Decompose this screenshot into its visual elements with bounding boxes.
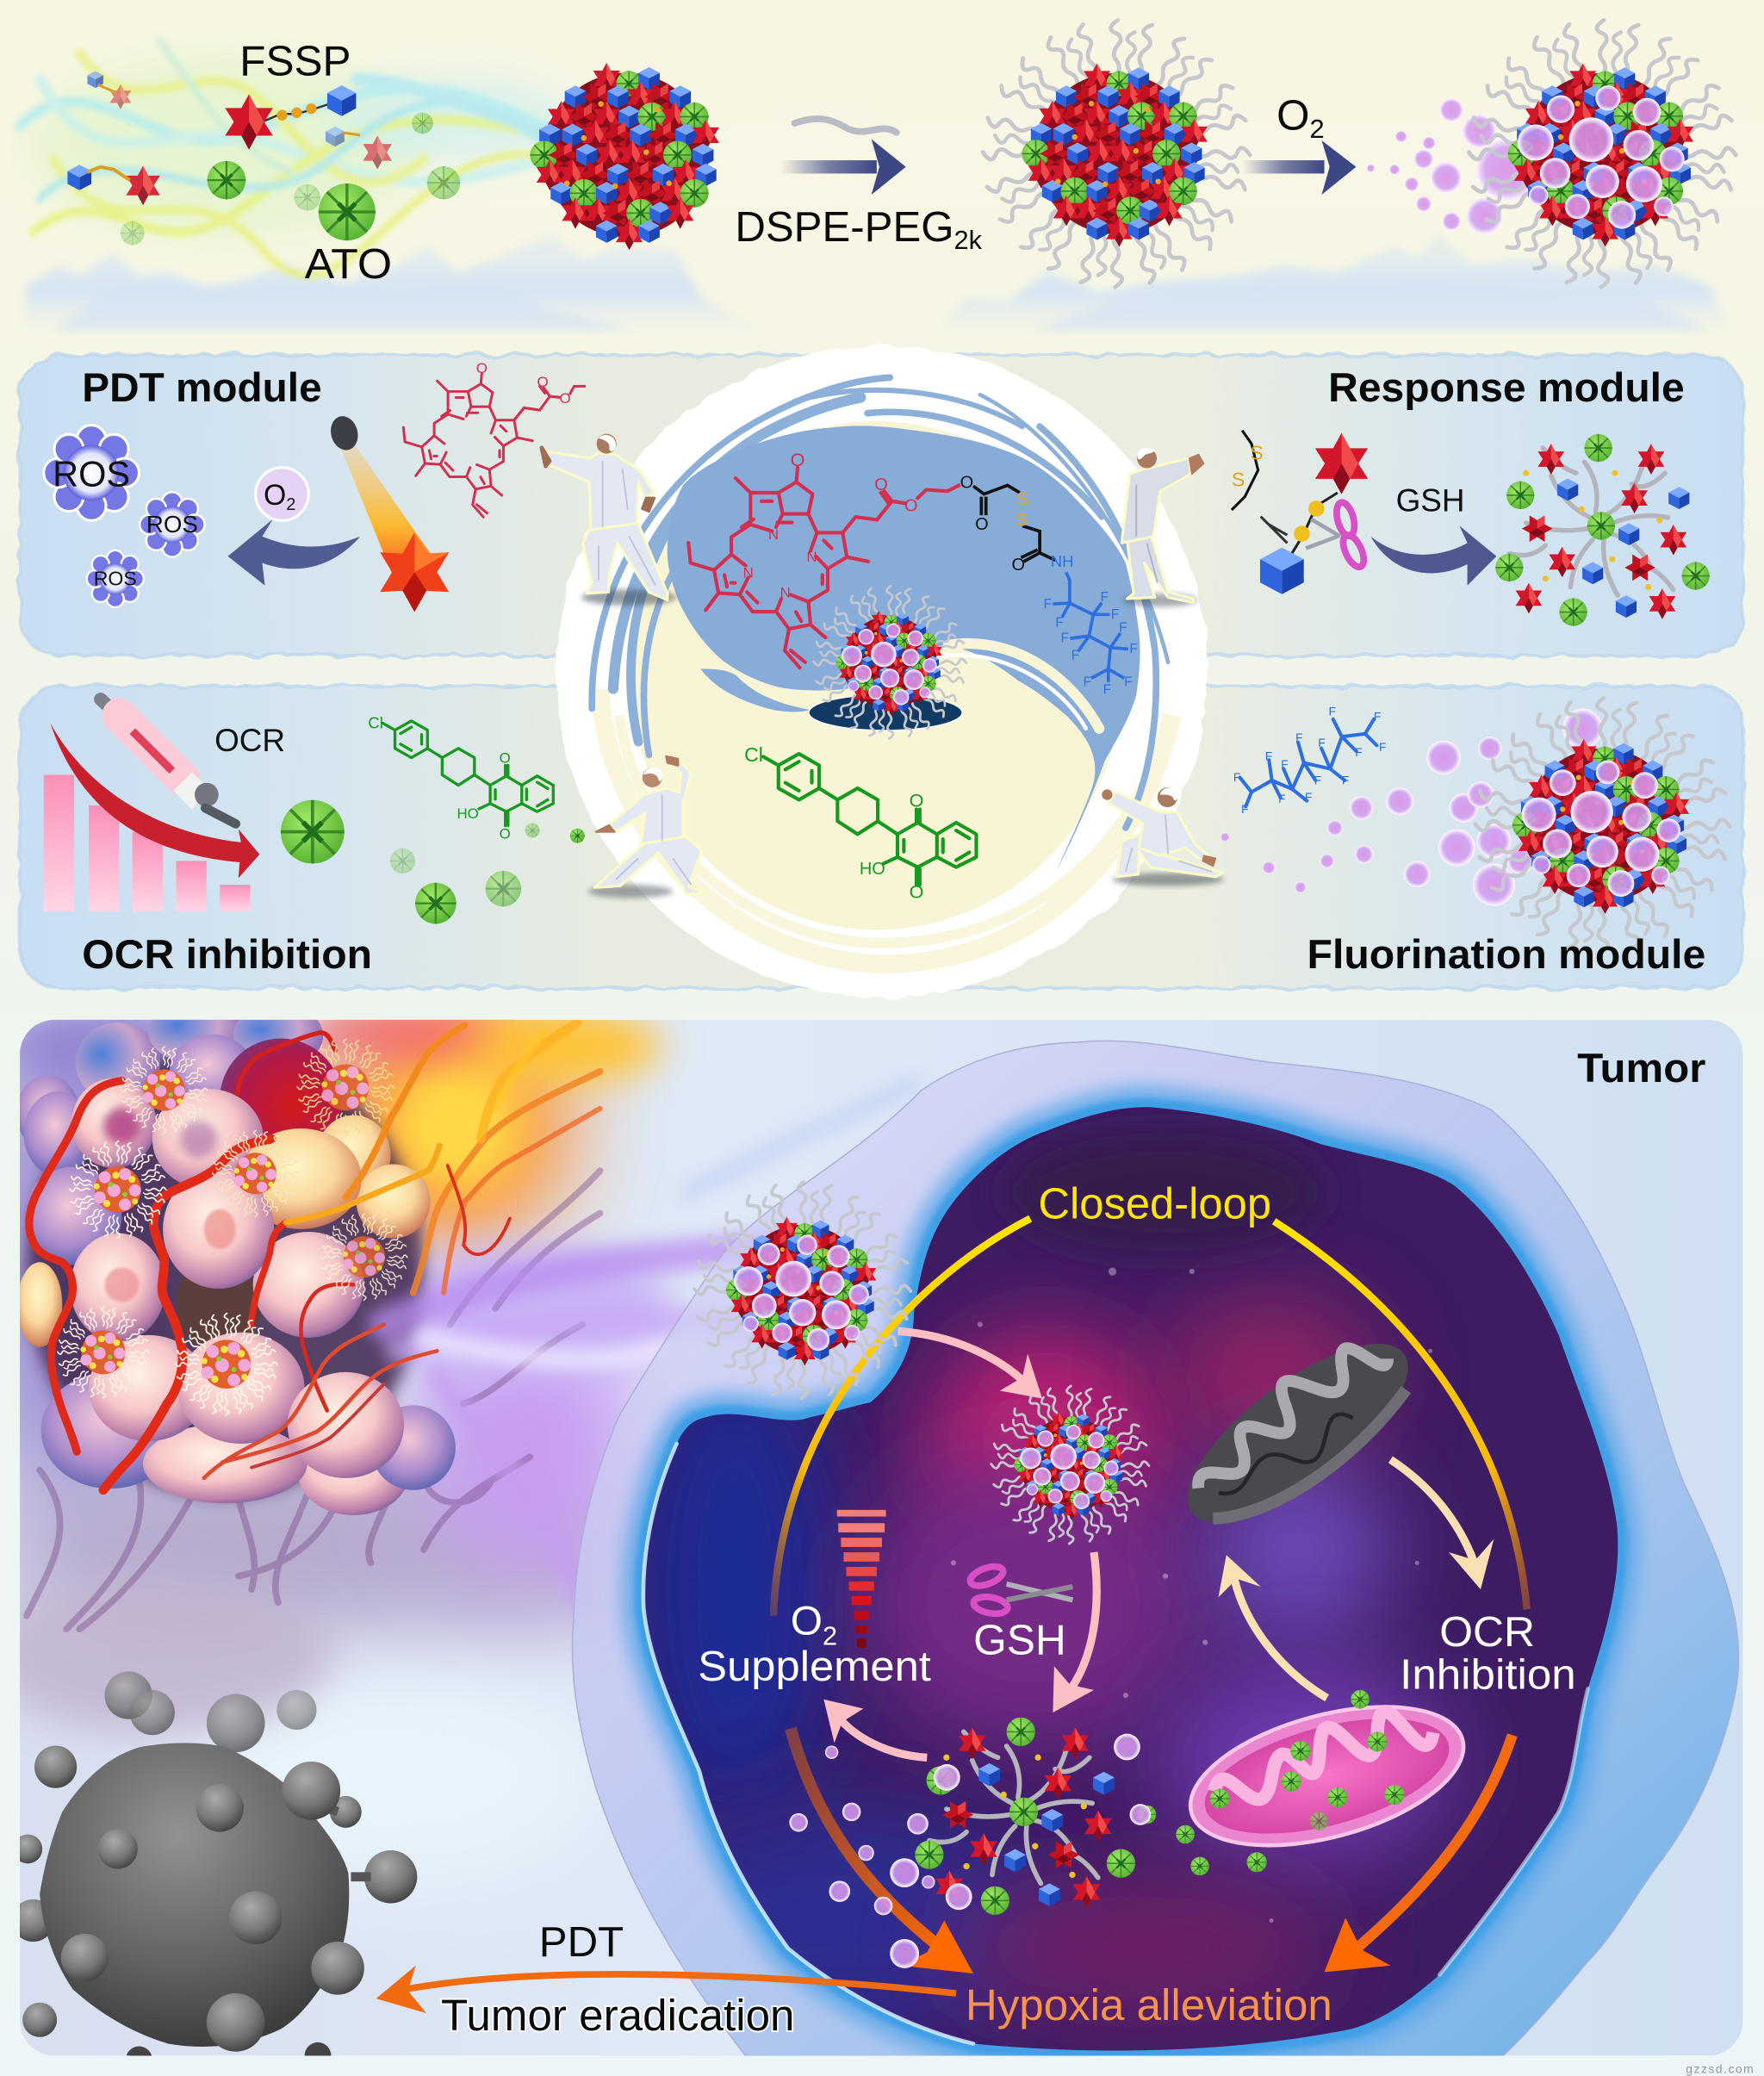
closed-loop yellow arc left xyxy=(773,1219,1030,1616)
linker chain: S xyxy=(1016,509,1028,530)
small ATO structure xyxy=(368,714,553,842)
central porphyrin molecule: N xyxy=(743,564,754,581)
panel: tumor microenvironment xyxy=(0,1000,1742,2073)
small porphyrin structure: O xyxy=(559,390,571,407)
label O2 top: O xyxy=(1276,92,1309,140)
white brush ring xyxy=(556,345,1208,998)
heading: OCR inhibition: OCR inhibition xyxy=(82,932,372,978)
disulfide fragment: S xyxy=(1250,442,1264,464)
linker chain: O xyxy=(975,515,989,534)
blue brush arcs xyxy=(592,377,1168,828)
central fluorinated chain: F xyxy=(1055,615,1064,630)
label Hypoxia alleviation: Hypoxia alleviation xyxy=(966,1980,1332,2029)
faded vessels xyxy=(27,1171,600,1629)
central fluorinated chain: F xyxy=(1043,597,1052,612)
dark gaps xyxy=(27,1047,424,1496)
label DSPE-PEG2k: DSPE-PEG xyxy=(735,203,954,251)
fluorinated chain: F xyxy=(1241,802,1249,816)
fluorinated chain: F xyxy=(1314,773,1321,786)
tumor cell outer membrane xyxy=(572,1041,1739,2067)
fluorinated chain: F xyxy=(1379,740,1386,754)
central nanoparticle xyxy=(814,586,966,738)
label FSSP: FSSP xyxy=(239,38,351,85)
light beams to tumor cell xyxy=(384,1086,914,1602)
label OCR Inhibition xyxy=(1400,1608,1576,1698)
disassembled fragments in cell xyxy=(915,1718,1135,1915)
watermark: gzzsd.com xyxy=(1686,2061,1755,2075)
central fluorinated chain: F xyxy=(1060,631,1069,646)
central fluorinated chain: F xyxy=(1101,590,1109,605)
small porphyrin structure: O xyxy=(537,374,549,390)
label PDT: PDT xyxy=(539,1918,624,1966)
fluorinated chain: F xyxy=(1342,773,1349,786)
fluorinated chain: F xyxy=(1318,736,1326,749)
central porphyrin molecule: N xyxy=(780,584,791,600)
cream streak band xyxy=(600,689,1172,964)
fluorinated chain: F xyxy=(1355,745,1363,759)
small ATO structure: O xyxy=(500,750,511,767)
label O2 supplement: Supplement xyxy=(698,1643,931,1690)
linker chain: O xyxy=(874,475,888,494)
label OCR Inhibition: OCR xyxy=(1439,1608,1535,1656)
panel background xyxy=(20,1020,1742,2055)
label GSH in cell: GSH xyxy=(973,1616,1066,1663)
mountains backdrop xyxy=(22,233,1732,331)
icon: oxygen bubble: O xyxy=(264,479,286,512)
arrow: GSH cleavage xyxy=(1370,525,1496,586)
heading: PDT module: PDT module xyxy=(82,365,322,411)
icon: ROS large xyxy=(44,426,139,520)
PEG chain icon xyxy=(795,119,897,133)
label DSPE-PEG2k: 2k xyxy=(954,225,983,255)
arrow: PEGylation xyxy=(781,139,906,195)
arrow fragments to supplement xyxy=(823,1700,927,1757)
central ATO molecule: O xyxy=(910,790,923,811)
icon: oxygen bubble xyxy=(256,468,308,520)
disassembled fragments xyxy=(1495,434,1710,626)
central fluorinated chain: F xyxy=(1119,620,1127,635)
icon: ROS small xyxy=(87,550,144,607)
arrow: oxygen loading xyxy=(1242,140,1356,195)
membrane highlight xyxy=(643,1444,1588,2043)
PDT module contents xyxy=(44,360,586,612)
oxygen gradient bar xyxy=(837,1510,886,1648)
label Tumor eradication: Tumor eradication xyxy=(441,1991,795,2040)
closed-loop yellow arc right xyxy=(1274,1221,1527,1609)
fluorinated chain: F xyxy=(1374,709,1381,723)
central fluorinated chain: F xyxy=(1129,642,1138,656)
label OCR: OCR xyxy=(214,723,285,758)
central porphyrin molecule: N xyxy=(806,549,817,565)
icon: star and cube linker xyxy=(1260,433,1368,594)
central fluorinated chain: F xyxy=(1111,607,1119,622)
oxygen bubbles in cell xyxy=(789,1734,1151,1968)
small ATO structure: HO xyxy=(457,805,479,822)
label O2 supplement xyxy=(698,1598,931,1690)
icon: ROS small: ROS xyxy=(94,568,137,590)
blue yang lobe xyxy=(668,426,1140,870)
FSSP prodrug molecule xyxy=(225,85,356,150)
tai chi figure lower left xyxy=(588,756,706,898)
label O2 supplement: 2 xyxy=(823,1621,837,1651)
oxygen bubbles xyxy=(1221,709,1602,906)
linker chain: NH xyxy=(1051,552,1073,570)
OCR inhibition contents xyxy=(44,699,585,923)
bare nanoparticle xyxy=(530,63,719,250)
central porphyrin molecule: N xyxy=(768,526,779,543)
arrow GSH to fragments xyxy=(1053,1552,1096,1712)
label OCR Inhibition: Inhibition xyxy=(1400,1650,1576,1698)
label O2 top: 2 xyxy=(1309,114,1325,144)
tai chi figure upper left xyxy=(542,434,677,606)
linker chain: O xyxy=(960,474,973,493)
Fluorination module contents xyxy=(1221,698,1730,953)
fluorinated chain: F xyxy=(1265,749,1272,763)
top section: nanoparticle self-assembly xyxy=(20,20,1736,331)
Response module contents xyxy=(1232,431,1710,626)
linker chain: S xyxy=(1016,488,1028,509)
icon: ROS medium xyxy=(140,492,205,557)
fluorinated chain: F xyxy=(1329,704,1336,718)
membrane rim xyxy=(643,1107,1618,2050)
fluorinated chain: F xyxy=(1281,757,1289,771)
arrow: red decline xyxy=(50,724,259,878)
fluorinated chain xyxy=(1233,704,1386,816)
white swoosh lines xyxy=(943,655,1086,729)
icon: diving mitochondrion rocket xyxy=(101,699,236,824)
heading Tumor: Tumor xyxy=(1577,1046,1705,1091)
yin-yang taiji emblem xyxy=(542,345,1224,998)
tumor cell cluster xyxy=(16,1000,456,1515)
icon: laser beam xyxy=(327,413,437,580)
cream swoosh tongue xyxy=(948,643,1099,729)
small porphyrin structure xyxy=(403,360,586,517)
tai chi figure lower right xyxy=(1102,787,1224,886)
central fluorinated chain: F xyxy=(1103,683,1111,698)
icon: irradiated star xyxy=(380,532,449,612)
arrow: PDT to tumor eradication xyxy=(376,1966,956,2013)
central ATO molecule xyxy=(744,743,976,902)
cream inner disc xyxy=(630,421,1123,929)
fluorinated chain: F xyxy=(1295,730,1303,744)
central ATO molecule: HO xyxy=(860,860,885,879)
icon: oxygen bubble: 2 xyxy=(286,495,295,514)
ATO balls around mitochondrion xyxy=(1138,1690,1405,1875)
arrow mitochondrion to OCR xyxy=(1390,1459,1494,1589)
central fluorinated chain: F xyxy=(1084,674,1091,689)
linker chain xyxy=(855,474,1073,575)
disulfide fragment: S xyxy=(1232,468,1245,490)
blue lobe tail xyxy=(700,668,811,712)
red blood vessels xyxy=(29,1022,600,1490)
label Closed-loop: Closed-loop xyxy=(1038,1179,1271,1228)
loaded nanoparticle xyxy=(1475,698,1730,953)
cell interior shading xyxy=(623,1086,1655,2067)
icon: ROS large: ROS xyxy=(53,453,130,494)
orange arrow right to hypoxia xyxy=(1325,1735,1512,1972)
disulfide fragment xyxy=(1232,431,1287,543)
label ATO: ATO xyxy=(305,240,392,288)
small porphyrin structure: O xyxy=(476,360,488,376)
icon: ATO ball xyxy=(281,800,345,864)
tai chi figure upper right xyxy=(1121,448,1204,606)
damaged mitochondrion xyxy=(1162,1313,1434,1553)
central fluorinated chain: F xyxy=(1124,674,1133,689)
small ATO structure: Cl xyxy=(368,714,383,732)
membrane blue glow band xyxy=(643,1107,1618,2050)
soft colour washes xyxy=(0,1007,675,1894)
PEGylated nanoparticle xyxy=(983,20,1250,287)
icon: ROS medium: ROS xyxy=(146,511,198,538)
oxygen bubbles incoming xyxy=(1367,98,1539,234)
ATO molecules xyxy=(121,113,460,245)
fluorinated chain: F xyxy=(1278,792,1286,805)
arrow to inner nanoparticle xyxy=(898,1331,1042,1399)
central fluorinated chain: F xyxy=(1071,649,1079,663)
central fluorinated chain xyxy=(1043,572,1138,698)
arrow mitochondrion recovery xyxy=(1219,1555,1327,1698)
healthy pink mitochondrion xyxy=(1176,1681,1478,1871)
central ATO molecule: Cl xyxy=(744,743,763,766)
dead grey tumor cell xyxy=(12,1671,417,2073)
bar chart: decreasing OCR xyxy=(44,774,251,911)
panel: PDT and response modules xyxy=(20,355,1742,656)
fluorinated chain: F xyxy=(1305,790,1312,804)
central porphyrin molecule xyxy=(688,450,868,668)
heading: Response module: Response module xyxy=(1328,365,1685,411)
label GSH: GSH xyxy=(1396,483,1465,519)
flowing streams xyxy=(20,40,569,276)
linker chain: O xyxy=(1011,556,1025,575)
small nanoparticles on cells xyxy=(58,1039,407,1415)
heading: Fluorination module: Fluorination module xyxy=(1307,932,1705,978)
fluorinated chain: F xyxy=(1233,770,1240,784)
internalised nanoparticle xyxy=(991,1386,1149,1544)
icon: scissors xyxy=(1306,500,1368,570)
central porphyrin molecule: O xyxy=(791,450,804,470)
black hole ellipse xyxy=(809,694,962,730)
linker chain: O xyxy=(904,497,918,516)
label O2 supplement: O xyxy=(791,1598,823,1644)
faded FSSP molecules xyxy=(67,71,392,205)
arrow: ROS generation xyxy=(227,519,360,586)
central ATO molecule: O xyxy=(910,881,923,902)
oxygen loaded nanoparticle xyxy=(1469,20,1736,287)
orange arrow left to hypoxia xyxy=(791,1729,973,1973)
entering nanoparticle xyxy=(694,1182,910,1398)
scattered ATO balls xyxy=(390,824,585,923)
small ATO structure: O xyxy=(500,825,511,842)
icon: scissors in cell xyxy=(968,1563,1072,1616)
panel: OCR and fluorination modules xyxy=(20,686,1742,988)
